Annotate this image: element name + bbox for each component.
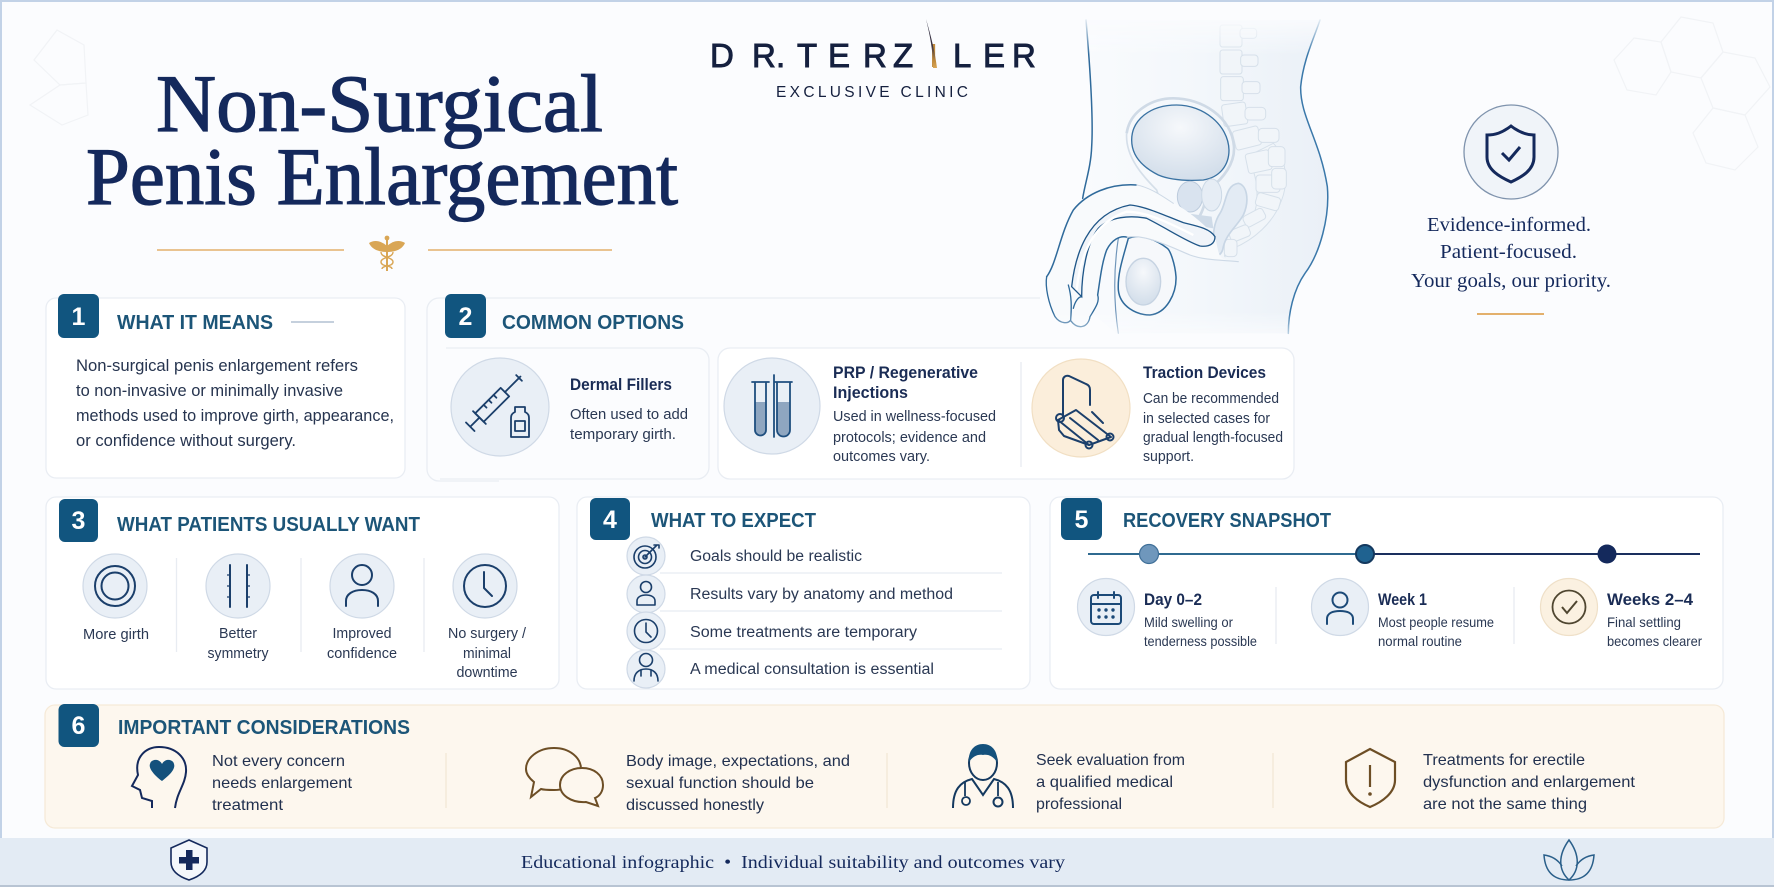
badge 5	[1061, 498, 1102, 540]
consideration: speech bubbles: Body image, expectations, and	[626, 753, 850, 770]
tagline: Patient-focused.	[1440, 241, 1577, 263]
text: PRP: protocols; evidence and	[833, 430, 986, 446]
consideration: doctor: Seek evaluation from	[1036, 752, 1185, 769]
badge 2: 2	[459, 303, 472, 331]
text: dermal fillers	[570, 376, 688, 443]
prostate	[1177, 181, 1203, 212]
logo: EXCLUSIVE CLINIC	[776, 84, 968, 101]
panel: important considerations	[45, 704, 1724, 828]
text: PRP: outcomes vary.	[833, 449, 930, 465]
tagline: Evidence-informed.	[1427, 214, 1591, 236]
consideration: warning shield: are not the same thing	[1423, 796, 1587, 813]
icon: PRP tubes	[724, 358, 820, 454]
row: consultation: A medical consultation is essential	[690, 661, 934, 678]
definition text	[76, 357, 394, 450]
item: improved confidence: confidence	[327, 646, 397, 662]
step: weeks 2-4	[1540, 578, 1702, 649]
row: results: Results vary by anatomy and method	[690, 586, 953, 603]
panel: what patients usually want	[46, 497, 559, 689]
text: dermal fillers: Often used to add	[570, 407, 688, 423]
body silhouette	[1200, 34, 1327, 326]
text: PRP: PRP / Regenerative	[833, 364, 978, 382]
anatomical illustration	[1046, 20, 1328, 333]
step: week 1	[1312, 578, 1494, 649]
consideration: doctor: a qualified medical	[1036, 774, 1173, 791]
option: dermal fillers	[440, 348, 709, 479]
step: day 0-2: Mild swelling or	[1144, 614, 1233, 630]
item: better symmetry: Better	[219, 626, 257, 642]
step: day 0-2: Day 0–2	[1144, 591, 1202, 609]
badge 4: 4	[603, 506, 617, 534]
icon: traction device	[1032, 359, 1130, 457]
item: no surgery: downtime	[456, 665, 518, 681]
bladder	[1127, 98, 1234, 224]
consideration: speech bubbles: sexual function should be	[626, 775, 814, 792]
text: traction	[1143, 364, 1283, 465]
consideration: warning shield	[1346, 749, 1636, 813]
consideration: head with heart: needs enlargement	[212, 775, 353, 792]
panel: what it means	[46, 294, 405, 478]
timeline	[1088, 544, 1700, 564]
scrotum and testis	[1118, 237, 1176, 315]
panel: common options	[427, 294, 1294, 481]
definition text: methods used to improve girth, appearance,	[76, 407, 394, 425]
text: traction: gradual length-focused	[1143, 430, 1283, 446]
text: dermal fillers: temporary girth.	[570, 427, 676, 443]
step: weeks 2-4: Final settling	[1607, 614, 1681, 630]
item: no surgery	[448, 554, 527, 681]
text: traction: Can be recommended	[1143, 391, 1279, 407]
tagline	[1411, 214, 1611, 314]
definition text: Non-surgical penis enlargement refers	[76, 357, 358, 375]
logo: DR.TERZ I LER	[710, 37, 1036, 74]
item: improved confidence: Improved	[332, 626, 392, 642]
text: traction: in selected cases for	[1143, 411, 1270, 427]
icon: syringe and vial	[451, 358, 549, 456]
badge 6	[58, 704, 99, 747]
badge 5: 5	[1075, 506, 1089, 534]
badge 3: 3	[72, 507, 85, 535]
row: results	[627, 575, 953, 613]
penis outer shape	[1134, 194, 1220, 256]
badge 6: 6	[72, 712, 85, 740]
text: traction: support.	[1143, 449, 1194, 465]
text: PRP: Injections	[833, 384, 908, 402]
text: PRP: Used in wellness-focused	[833, 409, 996, 425]
step: weeks 2-4: Weeks 2–4	[1607, 591, 1694, 609]
text: dermal fillers: Dermal Fillers	[570, 376, 672, 394]
row: consultation	[627, 650, 934, 688]
icon: lotus	[1544, 840, 1594, 880]
corpus	[1072, 205, 1215, 297]
item: better symmetry: symmetry	[208, 646, 269, 662]
text: traction: Traction Devices	[1143, 364, 1266, 382]
item: improved confidence	[327, 554, 397, 662]
consideration: doctor: professional	[1036, 796, 1122, 813]
footer note: Educational infographic • Individual suitability and outcomes vary	[521, 852, 1065, 872]
step: week 1: normal routine	[1378, 633, 1462, 649]
icon: medical shield	[171, 840, 207, 880]
heading 4: WHAT TO EXPECT	[651, 509, 816, 532]
heading 6: IMPORTANT CONSIDERATIONS	[118, 716, 410, 739]
logo	[710, 19, 1036, 101]
step: day 0-2	[1078, 578, 1257, 649]
heading 2: COMMON OPTIONS	[502, 311, 684, 334]
consideration: warning shield: Treatments for erectile	[1423, 752, 1585, 769]
spine	[1220, 25, 1286, 257]
consideration: head with heart: treatment	[212, 797, 284, 814]
step: week 1: Week 1	[1378, 591, 1427, 609]
row: goals: Goals should be realistic	[690, 548, 862, 565]
panel: what to expect	[577, 497, 1030, 689]
consideration: head with heart: Not every concern	[212, 753, 345, 770]
consideration: warning shield: dysfunction and enlargement	[1423, 774, 1636, 791]
row: temporary	[627, 612, 917, 650]
badge 1: 1	[72, 303, 86, 331]
badge 3	[59, 499, 98, 542]
shield badge	[1464, 105, 1558, 199]
consideration: speech bubbles: discussed honestly	[626, 797, 764, 814]
badge 2	[445, 294, 486, 338]
item: better symmetry	[206, 554, 270, 662]
heading 5: RECOVERY SNAPSHOT	[1123, 509, 1331, 532]
item: more girth	[83, 554, 149, 643]
consideration: head with heart	[132, 747, 353, 814]
title divider with caduceus	[157, 236, 612, 271]
consideration: doctor	[953, 744, 1185, 813]
options: PRP and traction	[718, 348, 1294, 479]
row: temporary: Some treatments are temporary	[690, 624, 917, 641]
consideration: speech bubbles	[526, 748, 850, 814]
step: day 0-2: tenderness possible	[1144, 633, 1257, 649]
definition text: to non-invasive or minimally invasive	[76, 382, 343, 400]
step: weeks 2-4: becomes clearer	[1607, 633, 1702, 649]
tagline: Your goals, our priority.	[1411, 270, 1611, 292]
step: week 1: Most people resume	[1378, 614, 1494, 630]
item: no surgery: No surgery /	[448, 626, 527, 642]
title: Penis Enlargement	[86, 131, 678, 222]
text: PRP	[833, 364, 996, 465]
row: goals	[627, 537, 862, 575]
title: Non-Surgical	[156, 58, 603, 149]
badge 4	[590, 498, 630, 540]
item: no surgery: minimal	[463, 646, 511, 662]
badge 1	[58, 294, 99, 338]
heading 3: WHAT PATIENTS USUALLY WANT	[117, 513, 420, 536]
title	[86, 58, 678, 222]
item: more girth: More girth	[83, 627, 149, 643]
heading 1: WHAT IT MEANS	[117, 311, 273, 334]
rectum	[1213, 183, 1247, 255]
footer band	[0, 838, 1774, 887]
definition text: or confidence without surgery.	[76, 432, 296, 450]
body outlines	[1083, 20, 1328, 333]
panel: recovery snapshot	[1050, 497, 1723, 689]
